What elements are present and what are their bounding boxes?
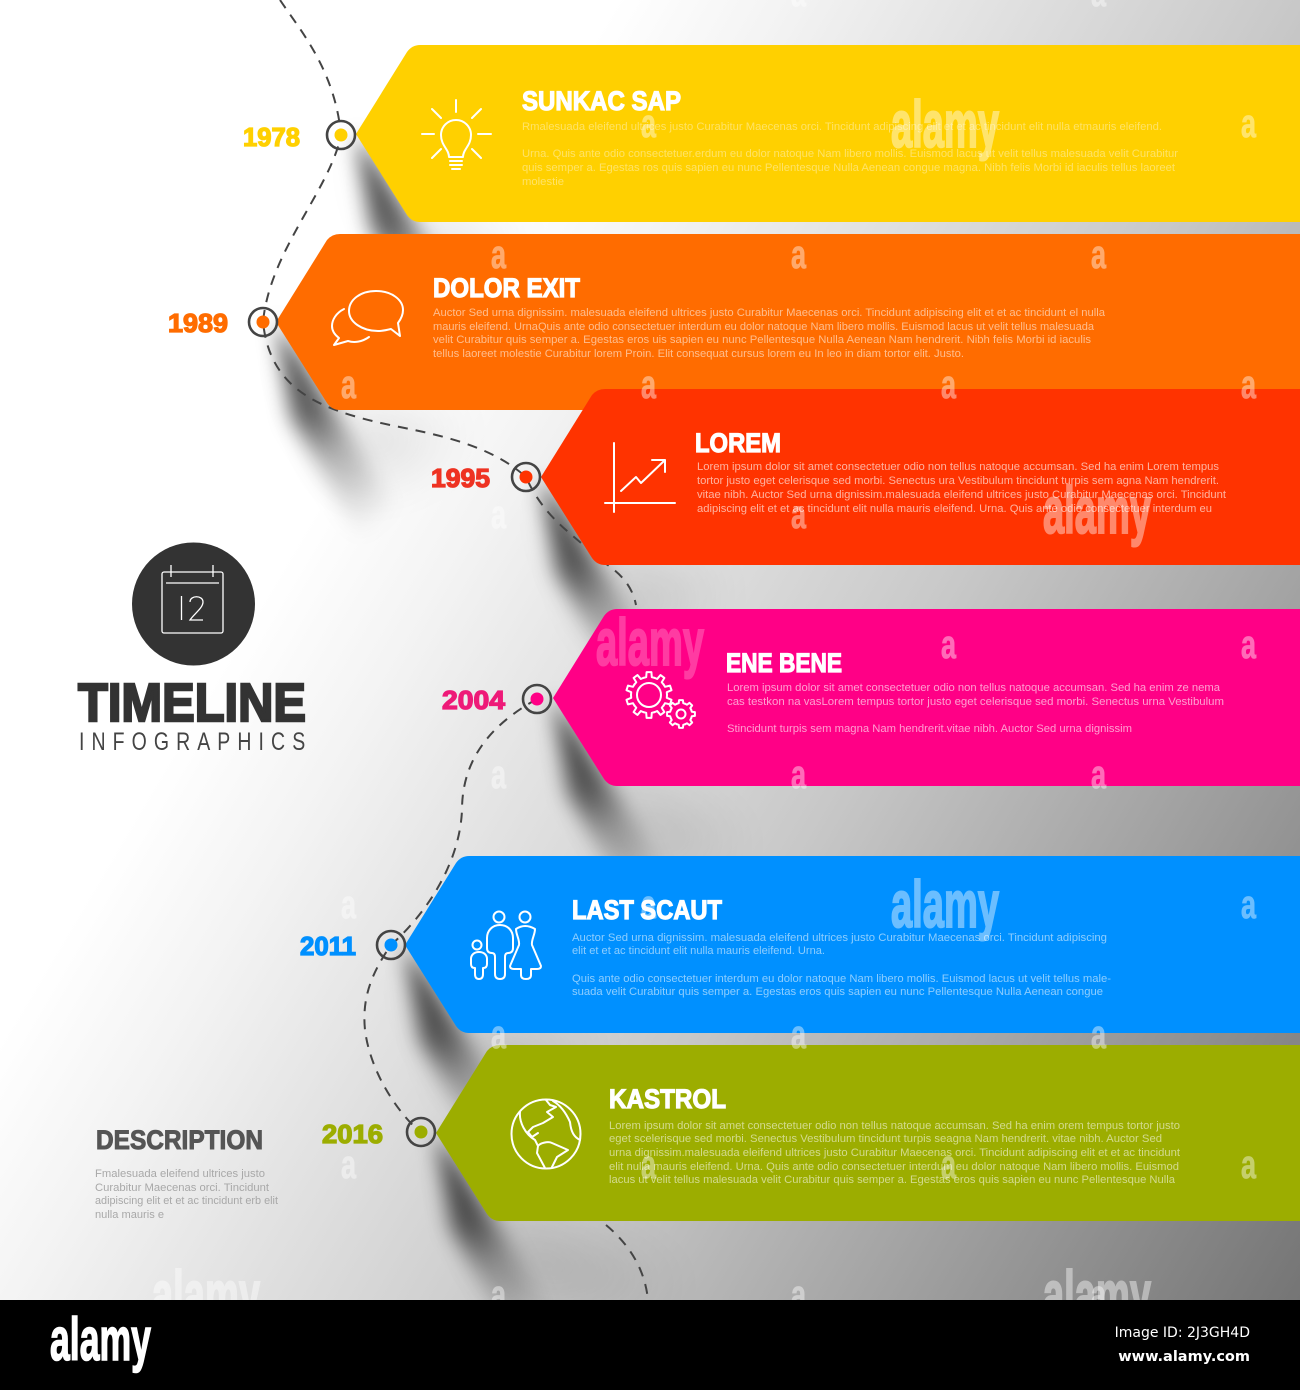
watermark: a [941,363,957,407]
text block: ene bene: cas testkon na vasLorem tempus tortor justo eget celerisque sed morbi. Senectus urna Vestibulum [727,696,1224,708]
footer bar: Image ID: 2J3GH4D [1115,1325,1250,1341]
text block: lorem: tortor justo eget celerisque sed morbi. Senectus ura Vestibulum tincidunt turpis sem agna Nam hendrerit. [697,475,1219,487]
text block: sunkac sap [522,121,1178,188]
icon: calendar badge [132,542,255,666]
timeline marker 1989: 1989 [168,308,228,338]
timeline marker 2004: 2004 [442,685,506,715]
timeline marker 2011 [300,931,405,961]
text block: lorem [697,461,1226,515]
title: TIMELINE [78,673,306,733]
watermark: a [791,753,807,797]
panel: dolor exit [276,234,1300,410]
footer bar: alamy [50,1306,151,1373]
heading: last scaut: LAST SCAUT [572,895,722,925]
heading: lorem: LOREM [695,428,781,458]
text block: dolor exit: Auctor Sed urna dignissim. malesuada eleifend ultrices justo Curabitur Maecenas orci. Tincidunt adipiscing elit et et ac tincidunt el nulla [433,307,1106,319]
watermark: alamy [1043,473,1151,547]
text block: sunkac sap: Urna. Quis ante odio consectetuer.erdum eu dolor natoque Nam libero mollis. Euismod lacus ut velit tellus malesuada velit Curabitur [522,148,1178,160]
watermark: alamy [152,1257,260,1331]
watermark: a [1091,753,1107,797]
text block: dolor exit [433,307,1106,360]
footer bar [0,1300,1300,1390]
watermark: alamy [891,87,999,161]
timeline marker 1978: 1978 [243,122,300,152]
text block: ene bene: Lorem ipsum dolor sit amet consectetuer odio non tellus natoque accumsan. Sed ha enim ze nema [727,682,1221,694]
watermark: a [341,1143,357,1187]
text block: lorem: adipiscing elit et et ac tincidunt elit nulla mauris eleifend. Urna. Quis ante odio consectetuer interdum eu [697,503,1212,515]
text block: last scaut [572,932,1111,998]
watermark: a [1091,233,1107,277]
watermark: a [1241,102,1257,146]
text block: last scaut: elit et et ac tincidunt elit nulla mauris eleifend. Urna. [572,945,825,957]
text block: sunkac sap: Rmalesuada eleifend ultrices justo Curabitur Maecenas orci. Tincidunt adipiscing elit et et ac tincidunt elit nulla etmauris eleifend. [522,121,1162,133]
heading: dolor exit: DOLOR EXIT [433,273,580,303]
timeline marker 2016: 2016 [322,1119,383,1149]
timeline marker 2004 [442,685,551,715]
dashed timeline path [263,0,648,1300]
timeline marker 2016 [322,1118,435,1149]
icon: gears [626,672,695,728]
panel: ene bene [553,609,1300,786]
description block: nulla mauris e [95,1209,164,1221]
watermark: a [941,623,957,667]
watermark: a [491,493,507,537]
watermark: alamy [596,605,704,679]
watermark: a [1091,1013,1107,1057]
footer bar: www.alamy.com [1118,1349,1250,1365]
panel: sunkac sap [356,45,1300,222]
timeline marker 1995 [431,463,540,493]
text block: kastrol: urna dignissim.malesuada eleifend ultrices justo Curabitur Maecenas orci. Tincidunt adipiscing elit et et ac tincidunt [609,1147,1180,1159]
description block: Fmalesuada eleifend ultrices justo [95,1168,265,1180]
watermark: a [791,1013,807,1057]
watermark: alamy [1043,1257,1151,1331]
description block [95,1125,278,1221]
text block: last scaut: Auctor Sed urna dignissim. malesuada eleifend ultrices justo Curabitur Maecenas orci. Tincidunt adipiscing [572,932,1107,944]
watermark: a [791,1273,807,1317]
watermark: a [941,1143,957,1187]
watermark: a [1091,1273,1107,1317]
watermark: a [491,233,507,277]
text block: dolor exit: velit Curabitur quis semper a. Egestas eros uis sapien eu nunc Pellentesque Nulla Aenean Nam hendrerit. Nibh felis Morbi id iaculis [433,334,1092,346]
icon: line chart [605,443,675,512]
watermark: a [1241,1143,1257,1187]
watermark: a [641,1143,657,1187]
watermark: a [791,233,807,277]
description block: DESCRIPTION [96,1125,263,1155]
text block: dolor exit: tellus laoreet molestie Curabitur lorem Proin. Elit consequat cursus lorem eu In leo in diam tortor elit. Justo. [433,348,964,360]
text block: last scaut: Quis ante odio consectetuer interdum eu dolor natoque Nam libero mollis. Euismod lacus ut velit tellus male- [572,973,1111,985]
text block: kastrol: elit nulla mauris eleifend. Urna. Quis ante odio consectetuer interdum eu dolor natoque Nam libero mollis. Euismod [609,1161,1179,1173]
text block: ene bene: Stincidunt turpis sem magna Nam hendrerit.vitae nibh. Auctor Sed urna dignissim [727,723,1132,735]
text block: sunkac sap: quis semper a. Egestas ros quis sapien eu nunc Pellentesque Nulla Aenean congue magna. Nibh felis Morbi id iaculis tellus laoreet [522,162,1175,174]
watermark: a [791,493,807,537]
text block: kastrol: Lorem ipsum dolor sit amet consectetuer odio non tellus natoque accumsan. Sed ha enim orem tempus tortor justo [609,1120,1180,1132]
watermark: a [641,363,657,407]
icon: light bulb [422,100,491,169]
watermark: a [491,753,507,797]
text block: lorem: Lorem ipsum dolor sit amet consectetuer odio non tellus natoque accumsan. Sed ha enim Lorem tempus [697,461,1220,473]
text block: dolor exit: mauris eleifend. UrnaQuis ante odio consectetuer interdum eu dolor natoque Nam libero mollis. Euismod lacus ut velit tellus malesuada [433,321,1095,333]
soft tab shadows [276,134,740,1290]
timeline marker 1989 [168,308,277,338]
text block: kastrol: eget scelerisque sed morbi. Senectus Vestibulum tincidunt turpis seagna Nam hendrerit. vitae nibh. Auctor Sed [609,1133,1162,1145]
panel: last scaut [405,856,1300,1033]
watermark: a [641,102,657,146]
text block: ene bene [727,682,1224,735]
heading: kastrol: KASTROL [609,1084,726,1114]
watermark: a [491,1013,507,1057]
watermark: a [341,363,357,407]
watermark: alamy [891,867,999,941]
timeline marker 1978 [243,121,355,152]
heading: sunkac sap: SUNKAC SAP [522,86,681,116]
text block: lorem: vitae nibh. Auctor Sed urna dignissim.malesuada eleifend ultrices justo Curabitur Maecenas orci. Tincidunt [697,489,1226,501]
timeline marker 1995: 1995 [431,463,490,493]
watermark: a [1241,363,1257,407]
text block: sunkac sap: molestie [522,176,564,188]
text block: kastrol [609,1120,1180,1186]
icon: globe [512,1100,580,1168]
text block: last scaut: suada velit Curabitur quis semper a. Egestas eros quis sapien eu nunc Pellentesque Nulla Aenean congue [572,986,1103,998]
timeline marker 2011: 2011 [300,931,356,961]
icon: family [471,912,541,979]
hard tab shadows [276,134,693,1358]
heading: ene bene: ENE BENE [726,648,842,678]
panel: kastrol [436,1045,1300,1221]
watermark: a [341,883,357,927]
icon: speech bubbles [332,291,403,345]
text block: kastrol: lacus ut velit tellus malesuada velit Curabitur quis semper a. Egestas eros quis sapien eu nunc Pellentesque Nulla [609,1174,1176,1186]
subtitle: INFOGRAPHICS [79,728,305,756]
panel: lorem [541,389,1300,565]
watermark: a [1241,623,1257,667]
description block: adipiscing elit et et ac tincidunt erb elit [95,1195,278,1207]
description block: Curabitur Maecenas orci. Tincidunt [95,1182,269,1194]
watermark: a [1241,883,1257,927]
watermark: a [491,1273,507,1317]
watermark: a [641,883,657,927]
